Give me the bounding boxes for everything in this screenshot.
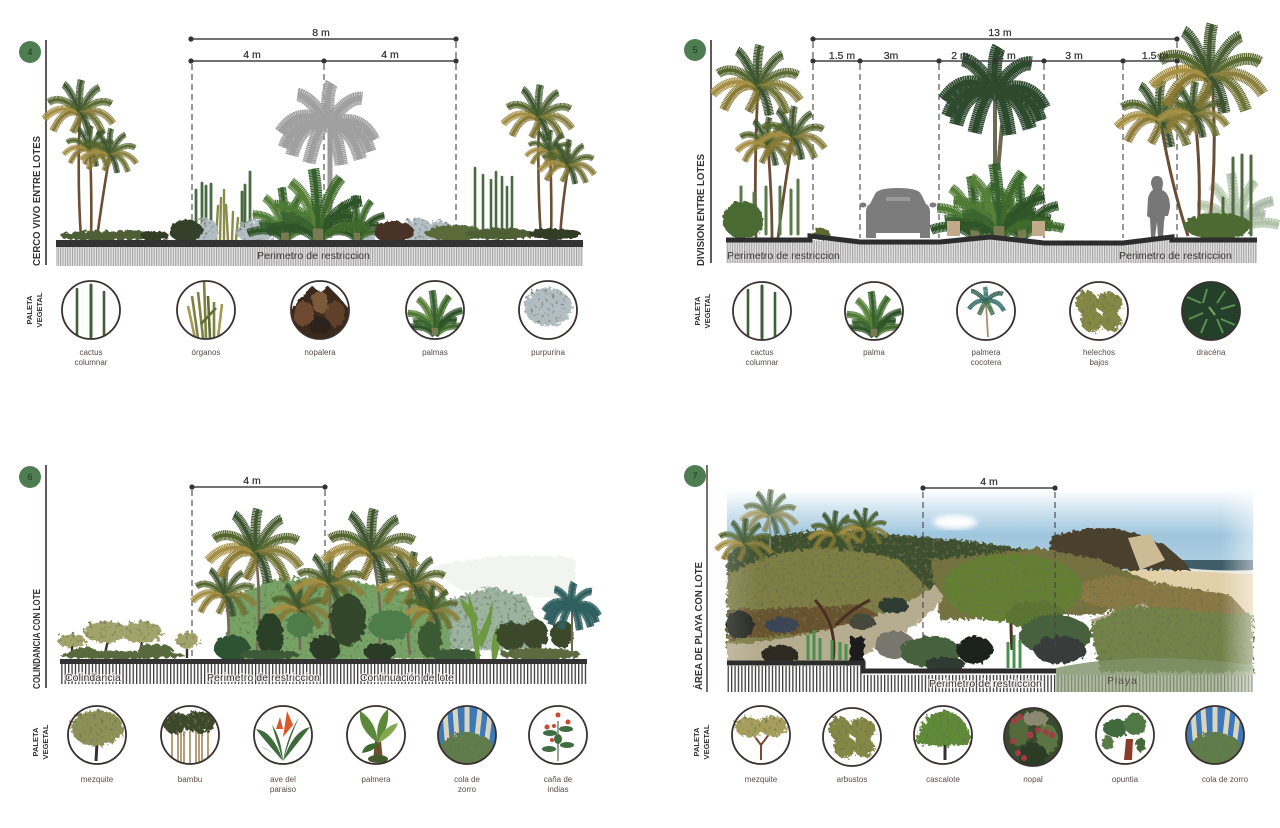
palm group right — [503, 85, 594, 238]
plant: helechos bajos — [1070, 282, 1128, 367]
plant: palma — [842, 282, 906, 357]
ground profile and hatching — [727, 663, 1253, 692]
person silhouette — [1147, 176, 1170, 237]
mezquite row — [58, 621, 199, 659]
palette heading — [693, 293, 712, 328]
labels: perimetro and playa: Playa — [1107, 675, 1137, 687]
stone signs — [947, 221, 1045, 236]
labels: perimetro and playa — [929, 675, 1137, 690]
plant: ave del paraiso: ave del — [270, 775, 296, 784]
plant: cola de zorro — [1186, 706, 1249, 784]
beach collage scene — [716, 490, 1253, 692]
plant: dracena: dracéna — [1197, 348, 1226, 357]
low ground vegetation — [61, 228, 581, 241]
dimension lines: 13 m and segments — [810, 27, 1180, 64]
label: perimetro: Perimetro de restriccion — [257, 250, 370, 262]
plant: cactus columnar — [733, 282, 791, 367]
palette heading — [692, 724, 711, 759]
plant: cola de zorro — [438, 706, 496, 794]
section title: COLINDANCIA CON LOTE — [31, 589, 43, 689]
dimension 4 m — [920, 476, 1058, 650]
section title: DIVISION ENTRE LOTES — [695, 154, 707, 266]
plant: purpurina — [519, 281, 577, 357]
dimension lines: 13 m and segments: 1.5 m — [1142, 50, 1168, 62]
plant: nopalera: nopalera — [304, 348, 336, 357]
panel 7: area de playa con lote — [684, 465, 1253, 784]
labels: perimetro: Perimetro de restriccion — [1119, 250, 1232, 262]
number badge 4: 4 — [27, 47, 33, 57]
number badge 6: 6 — [27, 472, 33, 482]
ground band and hatching — [56, 240, 583, 266]
plant: palmera: palmera — [362, 775, 391, 784]
plant: cana de indias: caña de — [544, 775, 573, 784]
dimension lines: 8 m and 4 m: 4 m — [243, 49, 261, 61]
dimension lines: 8 m and 4 m: 8 m — [312, 27, 330, 39]
plant: palmera cocotera: palmera — [972, 348, 1001, 357]
dimension 4 m — [189, 475, 328, 660]
cactus columns left and organos — [196, 172, 250, 240]
central palm shrub — [931, 164, 1064, 238]
plant: nopal — [1004, 708, 1062, 784]
plant: cactus columnar — [62, 281, 120, 367]
plant: palmas: palmas — [422, 348, 448, 357]
plant: organos — [177, 280, 235, 357]
number badge 7 — [684, 465, 706, 487]
pale palm and cactus right — [1191, 155, 1279, 235]
palette heading: PALETA — [692, 727, 701, 756]
labels: perimetro and playa: Perimetro de restriccion — [929, 678, 1042, 690]
pale background sketch — [430, 556, 575, 600]
plant: cana de indias — [529, 706, 587, 794]
dimension lines: 13 m and segments: 13 m — [988, 27, 1012, 39]
plant: mezquite: mezquite — [81, 775, 114, 784]
dimension lines: 13 m and segments: 1.5 m — [829, 50, 855, 62]
plant: mezquite — [68, 706, 126, 784]
number badge 5: 5 — [692, 45, 698, 55]
plant: nopal: nopal — [1023, 775, 1043, 784]
ground profile and hatching — [726, 236, 1257, 263]
section title: ÁREA DE PLAYA CON LOTE — [692, 562, 705, 690]
dimension lines: 8 m and 4 m — [188, 27, 459, 226]
plant: cola de zorro: cola de zorro — [1202, 775, 1249, 784]
dark tree row — [496, 619, 580, 660]
dimension lines: 13 m and segments: 2 m — [951, 50, 969, 62]
plant: helechos bajos: bajos — [1089, 358, 1109, 367]
plant: cactus columnar: cactus — [750, 348, 774, 357]
number badge 5 — [684, 39, 706, 61]
palette heading — [25, 292, 44, 327]
plant: palmera — [347, 706, 405, 784]
grey royal palm — [280, 83, 374, 238]
dimension lines: 13 m and segments: 3 m — [1065, 50, 1083, 62]
labels: zones — [65, 672, 454, 684]
plant: mezquite — [732, 706, 790, 784]
plant: cola de zorro: zorro — [458, 785, 477, 794]
plant: bambu: bambu — [178, 775, 202, 784]
section title: CERCO VIVO ENTRE LOTES — [31, 136, 43, 266]
central palms shrub — [248, 169, 389, 240]
dimension lines: 13 m and segments: 3m — [884, 50, 899, 62]
plant: ave del paraiso — [254, 706, 312, 794]
plant: organos: órganos — [192, 348, 220, 357]
palette heading: VEGETAL — [35, 292, 44, 327]
plant: mezquite: mezquite — [745, 775, 778, 784]
palm group right — [1117, 24, 1263, 238]
plant: palma: palma — [863, 348, 885, 357]
plant: cana de indias: indias — [548, 785, 568, 794]
plant: palmera cocotera — [957, 282, 1015, 367]
plant: nopalera — [290, 281, 350, 357]
dimension lines: 13 m and segments: 2 m — [998, 50, 1016, 62]
palette heading: VEGETAL — [703, 293, 712, 328]
plant: opuntia: opuntia — [1112, 775, 1139, 784]
panel 4: cerco vivo entre lotes — [19, 27, 594, 367]
plant: purpurina: purpurina — [531, 348, 565, 357]
plant: ave del paraiso: paraiso — [270, 785, 297, 794]
labels: perimetro: Perimetro de restriccion — [727, 250, 840, 262]
number badge 7: 7 — [692, 471, 698, 481]
teal palm right — [544, 583, 598, 655]
ground band and hatching — [60, 659, 587, 684]
car silhouette — [860, 188, 936, 238]
panel 5: division entre lotes — [684, 24, 1279, 367]
purpurina shrubs — [196, 218, 455, 246]
plant: arbustos — [823, 708, 881, 784]
dimension 4 m: 4 m — [243, 475, 261, 487]
plant: bambu — [161, 706, 219, 784]
dimension dashes — [813, 42, 1177, 238]
panel 6: colindancia con lote — [19, 465, 598, 794]
central royal palm — [944, 47, 1044, 170]
palette heading: VEGETAL — [41, 724, 50, 759]
plant: arbustos: arbustos — [837, 775, 867, 784]
banana plants — [460, 595, 500, 660]
plant: opuntia — [1096, 706, 1154, 784]
plant: cascalote: cascalote — [926, 775, 960, 784]
plant: palmas — [403, 281, 467, 357]
labels: perimetro — [727, 250, 1232, 262]
plant: cola de zorro: cola de — [454, 775, 480, 784]
palm group left — [712, 45, 825, 238]
dimension 4 m: 4 m — [980, 476, 998, 488]
palette heading: PALETA — [31, 727, 40, 756]
palette heading: VEGETAL — [702, 724, 711, 759]
palm group left — [44, 80, 136, 238]
palette heading: PALETA — [693, 296, 702, 325]
cactus columns right — [475, 168, 512, 237]
plant: cactus columnar: columnar — [746, 358, 779, 367]
understorey shrubs — [214, 594, 480, 661]
number badge 6 — [19, 466, 41, 488]
plant: cactus columnar: columnar — [75, 358, 108, 367]
labels: zones: Continuación de lote — [360, 672, 454, 684]
background forest — [228, 576, 542, 660]
labels: zones: Colindancia — [65, 672, 121, 684]
plant: cactus columnar: cactus — [79, 348, 103, 357]
number badge 4 — [19, 41, 41, 63]
plant: cascalote — [914, 706, 972, 784]
cactus and shrub left — [723, 180, 830, 240]
labels: zones: Perimetro de restriccion — [207, 672, 320, 684]
plant: helechos bajos: helechos — [1083, 348, 1115, 357]
palette heading — [31, 724, 50, 759]
palm grove — [192, 509, 458, 660]
low shrub right — [1184, 213, 1252, 239]
dark and brown shrubs — [169, 220, 485, 243]
plant: dracena — [1182, 282, 1240, 357]
palette heading: PALETA — [25, 295, 34, 324]
plant: palmera cocotera: cocotera — [971, 358, 1002, 367]
dimension lines: 8 m and 4 m: 4 m — [381, 49, 399, 61]
